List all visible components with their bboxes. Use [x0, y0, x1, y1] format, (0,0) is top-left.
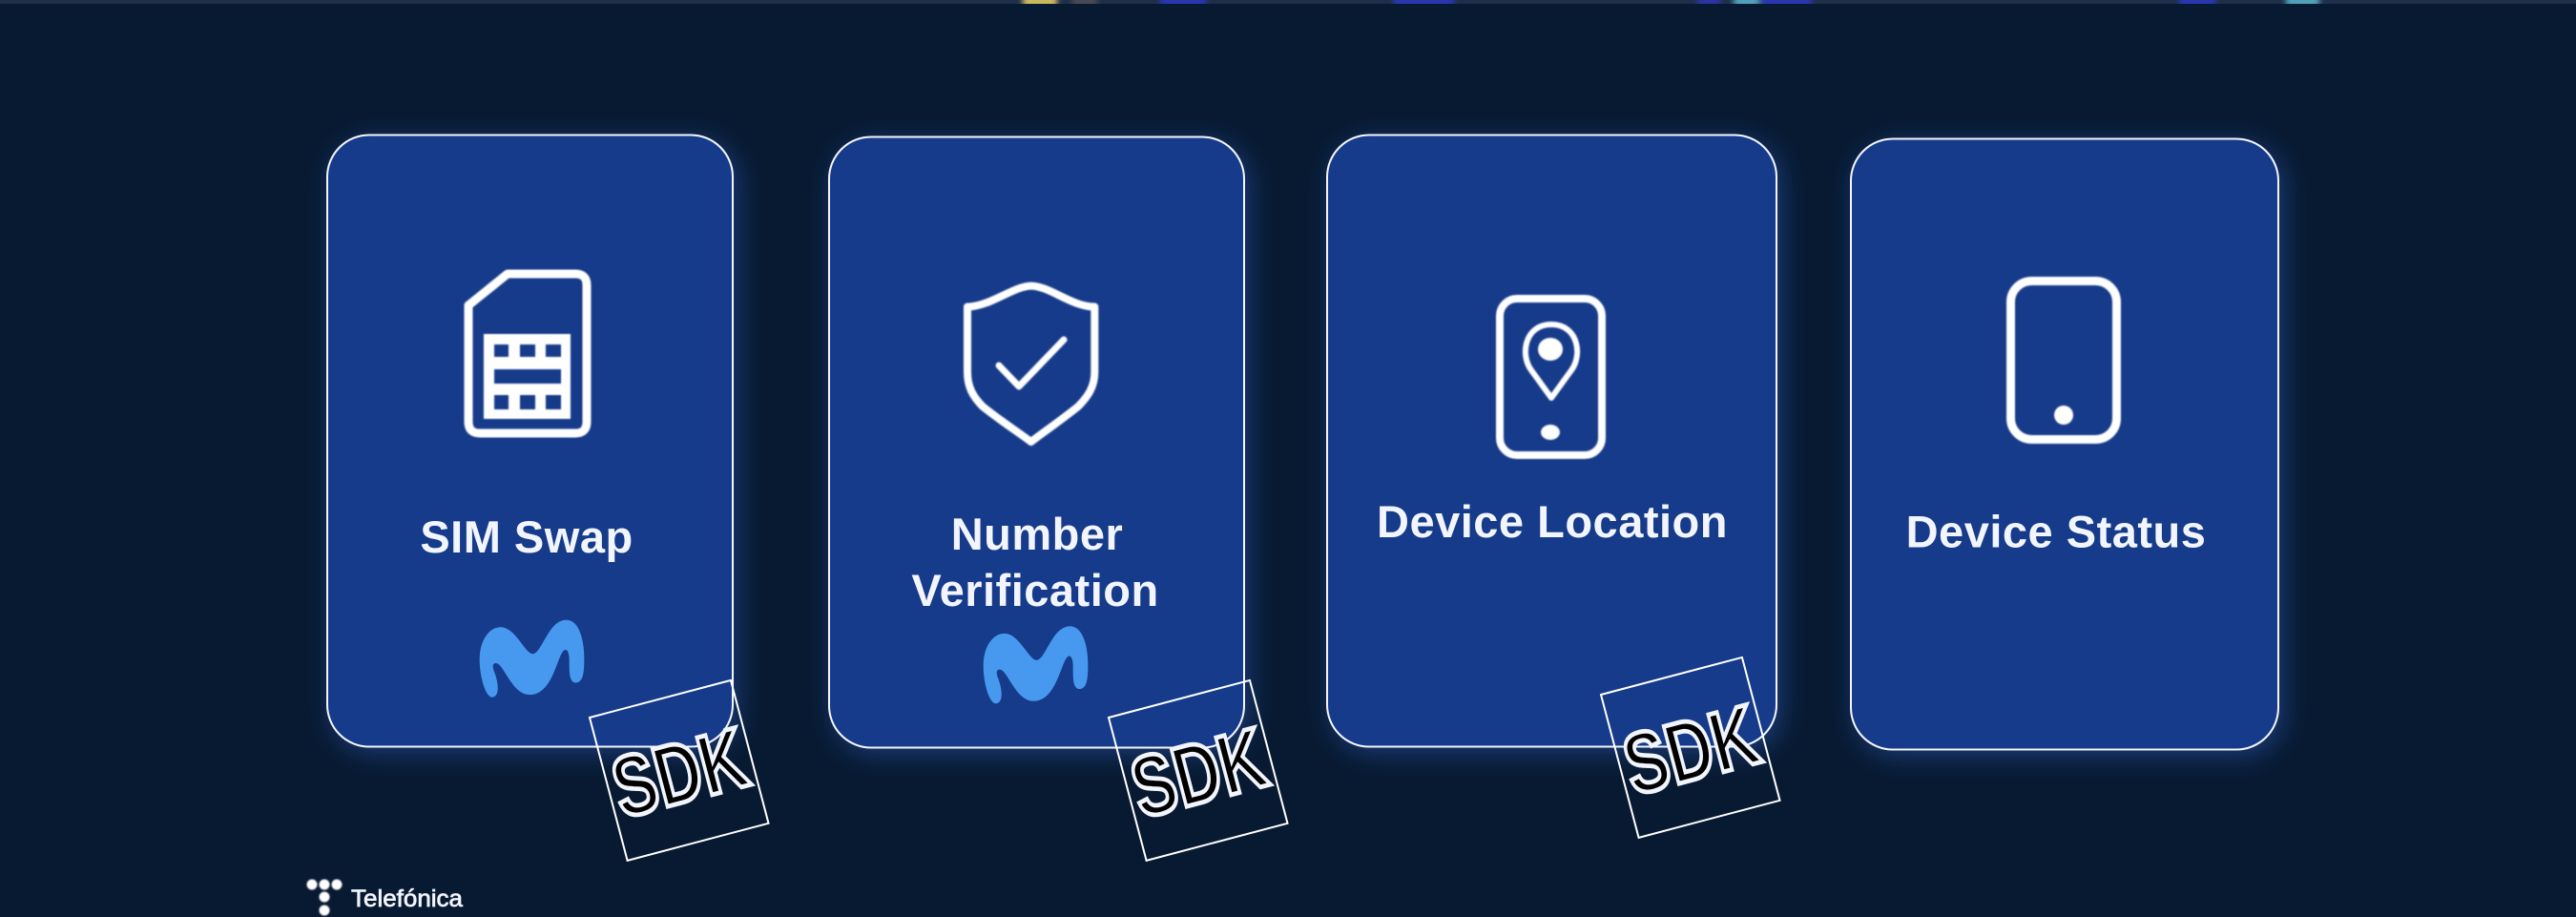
badge: SDK: SDK: [1122, 710, 1277, 837]
Telefónica logo: [307, 880, 463, 916]
badge: SDK: [590, 680, 769, 861]
icon: Movistar logo: [984, 627, 1088, 702]
heading: Device Location: Device Location: [1377, 496, 1728, 547]
icon: Movistar logo: [480, 621, 584, 697]
heading: Number Verification: [911, 509, 1159, 615]
badge: SDK: [1109, 680, 1288, 861]
badge: SDK: [1601, 657, 1780, 838]
badge: SDK: SDK: [603, 710, 758, 837]
panel: Device Location: [1327, 135, 1780, 838]
heading: Number Verification: Verification: [911, 565, 1159, 615]
heading: Number Verification: Number: [951, 509, 1123, 559]
top strip: [0, 0, 2576, 4]
icon: SIM card: [468, 274, 587, 433]
icon: phone: [2011, 281, 2116, 439]
panel: Device Status: [1851, 139, 2278, 750]
icon: phone with location pin: [1500, 299, 1602, 455]
panel: Number Verification: [829, 137, 1288, 861]
badge: SDK: SDK: [1614, 687, 1769, 814]
panel: SIM Swap: [327, 135, 769, 861]
Telefónica logo: Telefónica: [351, 886, 463, 912]
heading: Device Status: Device Status: [1906, 506, 2206, 557]
icon: shield with check: [967, 286, 1094, 442]
heading: SIM Swap: SIM Swap: [420, 511, 634, 562]
